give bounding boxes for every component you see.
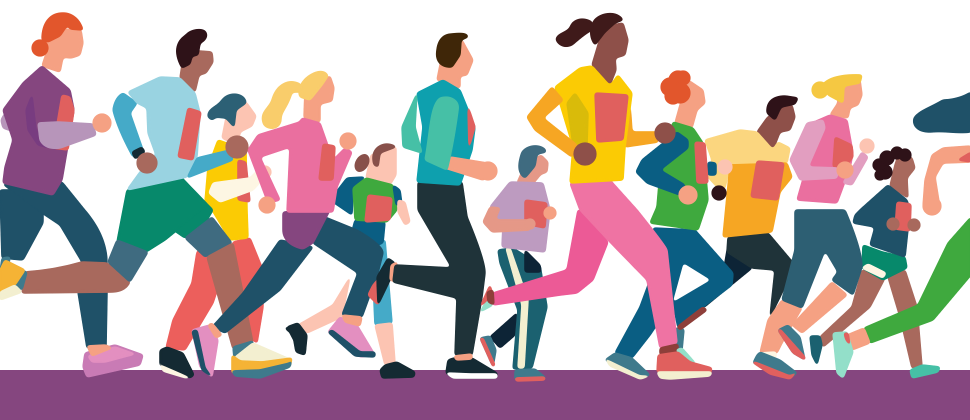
runner: pink shirt, blonde ponytail [192, 72, 383, 377]
runner: green shirt, red curly hair [605, 71, 733, 379]
runner: pink shirt, blonde bun [752, 75, 874, 379]
runner: yellow shirt, pink leggings [480, 14, 712, 379]
runner: navy shirt, green shorts, curly hair [810, 147, 940, 378]
runner: yellow shirt, teal hair [157, 94, 271, 378]
runner: purple shirt, red hair [0, 13, 143, 377]
runner: far right, green leggings [833, 92, 970, 378]
runner: child, lilac shirt [480, 146, 556, 381]
runner: green vest, brown ponytail [287, 144, 415, 378]
ground band [0, 370, 970, 420]
runner: teal shirt, dark trousers [368, 33, 497, 378]
runner: light blue shirt, green shorts [0, 30, 292, 378]
runner: orange shirt, dark hair [703, 96, 798, 317]
